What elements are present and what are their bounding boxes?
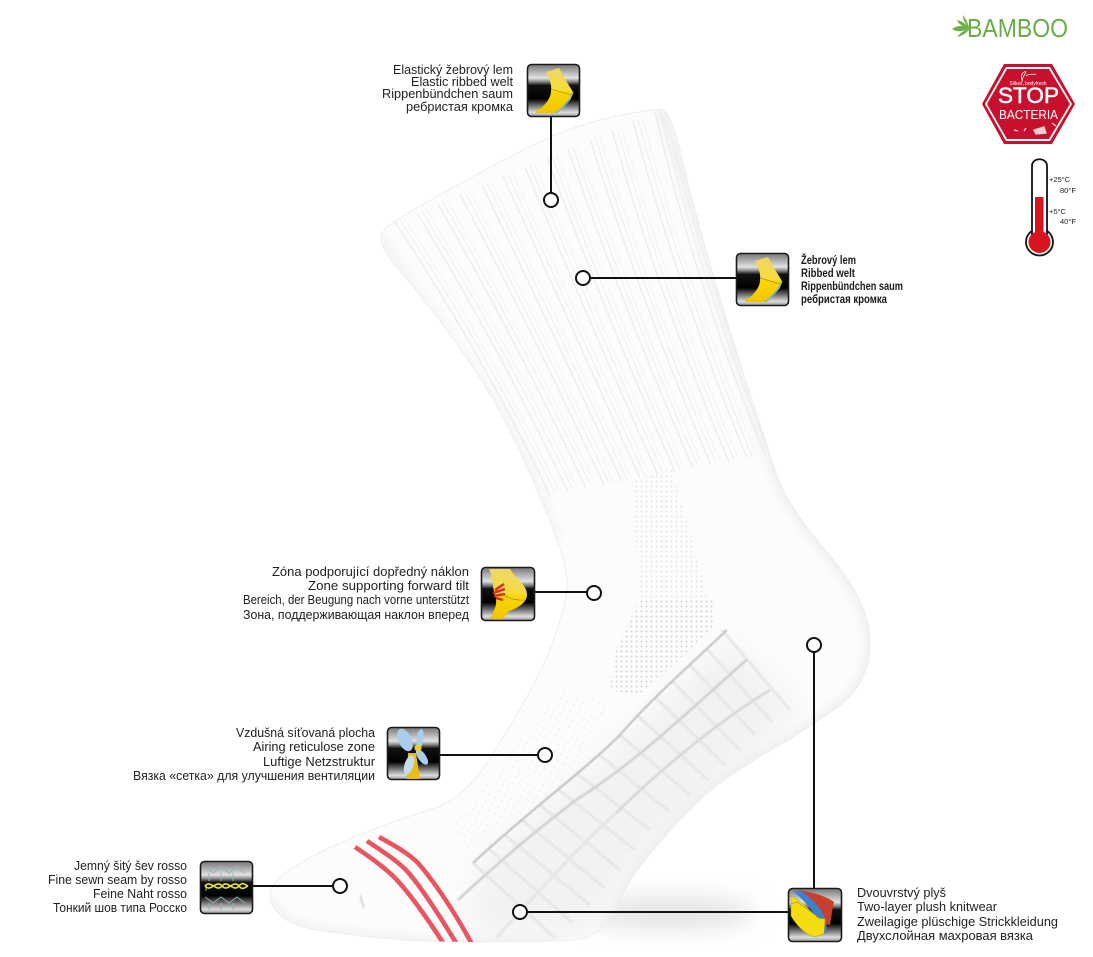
icon: forward tilt zone bbox=[482, 568, 534, 620]
sock body bbox=[270, 109, 870, 942]
sole grid bbox=[458, 630, 790, 938]
text: two-layer plush: Two-layer plush knitwear bbox=[857, 900, 997, 914]
text: elastic ribbed welt: Elastic ribbed welt bbox=[411, 75, 514, 89]
text: two-layer plush: Zweilagige plüschige Strickkleidung bbox=[857, 915, 1058, 929]
text: elastic ribbed welt: Rippenbündchen saum bbox=[382, 87, 513, 101]
text: ribbed welt: Žebrový lem bbox=[801, 254, 856, 267]
text: airing zone bbox=[133, 726, 375, 783]
red toe stripes bbox=[355, 837, 473, 946]
marker circles bbox=[333, 193, 821, 919]
leg ribs bbox=[395, 112, 765, 495]
icon: elastic ribbed welt sock bbox=[528, 64, 580, 116]
text: forward tilt zone bbox=[243, 565, 470, 622]
text: forward tilt zone: Zone supporting forward tilt bbox=[308, 579, 470, 593]
text: sewn seam: Fine sewn seam by rosso bbox=[48, 873, 187, 887]
text: ribbed welt: Ribbed welt bbox=[801, 268, 855, 280]
temperature labels: +25°C bbox=[1049, 175, 1071, 184]
text: airing zone: Вязка «сетка» для улучшения вентиляции bbox=[133, 769, 375, 783]
floor shadow bbox=[585, 896, 755, 930]
foot tone bbox=[486, 664, 776, 924]
icon: sewn seam bbox=[200, 862, 252, 914]
text: two-layer plush: Двухслойная махровая вязка bbox=[857, 929, 1033, 943]
text: ribbed welt bbox=[801, 254, 903, 306]
text: forward tilt zone: Bereich, der Beugung nach vorne unterstützt bbox=[243, 593, 469, 607]
icon: thermometer bbox=[1026, 159, 1076, 256]
text: forward tilt zone: Зона, поддерживающая наклон вперед bbox=[243, 608, 470, 622]
temperature labels bbox=[1049, 175, 1076, 226]
icon: airing fan bbox=[388, 726, 440, 780]
text: sewn seam bbox=[48, 859, 187, 915]
inner edge shading bbox=[381, 236, 557, 540]
badge: stop bacteria bbox=[982, 64, 1075, 144]
badge: stop bacteria: STOP bbox=[998, 83, 1059, 108]
text: airing zone: Vzdušná síťovaná plocha bbox=[236, 726, 375, 740]
temperature labels: 40°F bbox=[1060, 217, 1076, 226]
sock illustration bbox=[270, 108, 870, 946]
badge: stop bacteria: Silkes, bodyfresh bbox=[1010, 81, 1046, 87]
text: elastic ribbed welt: Elastický žebrový lem bbox=[393, 63, 513, 77]
text: forward tilt zone: Zóna podporující dopředný náklon bbox=[272, 565, 469, 579]
text: ribbed welt: ребристая кромка bbox=[801, 294, 888, 306]
text: elastic ribbed welt bbox=[382, 63, 514, 114]
logo: bamboo: BAMBOO bbox=[967, 13, 1068, 43]
badge: stop bacteria: BACTERIA bbox=[999, 107, 1058, 122]
text: airing zone: Airing reticulose zone bbox=[253, 740, 375, 754]
text: sewn seam: Feine Naht rosso bbox=[93, 887, 187, 901]
text: elastic ribbed welt: ребристая кромка bbox=[406, 100, 513, 114]
instep mesh bbox=[450, 690, 610, 850]
icon: two-layer plush bbox=[788, 888, 842, 942]
icon: ribbed welt sock bbox=[736, 254, 788, 306]
text: two-layer plush bbox=[857, 886, 1058, 943]
ankle mesh bbox=[632, 470, 708, 600]
callout lines bbox=[252, 116, 814, 912]
temperature labels: +5°C bbox=[1049, 207, 1067, 216]
toe crease bbox=[360, 895, 364, 908]
text: two-layer plush: Dvouvrstvý plyš bbox=[857, 886, 946, 900]
text: sewn seam: Jemný šitý šev rosso bbox=[74, 859, 187, 873]
text: ribbed welt: Rippenbündchen saum bbox=[801, 281, 903, 293]
temperature labels: 80°F bbox=[1060, 186, 1076, 195]
text: sewn seam: Тонкий шов типа Росско bbox=[53, 901, 187, 915]
text: airing zone: Luftige Netzstruktur bbox=[263, 755, 375, 769]
heel-side mesh bbox=[610, 600, 716, 696]
